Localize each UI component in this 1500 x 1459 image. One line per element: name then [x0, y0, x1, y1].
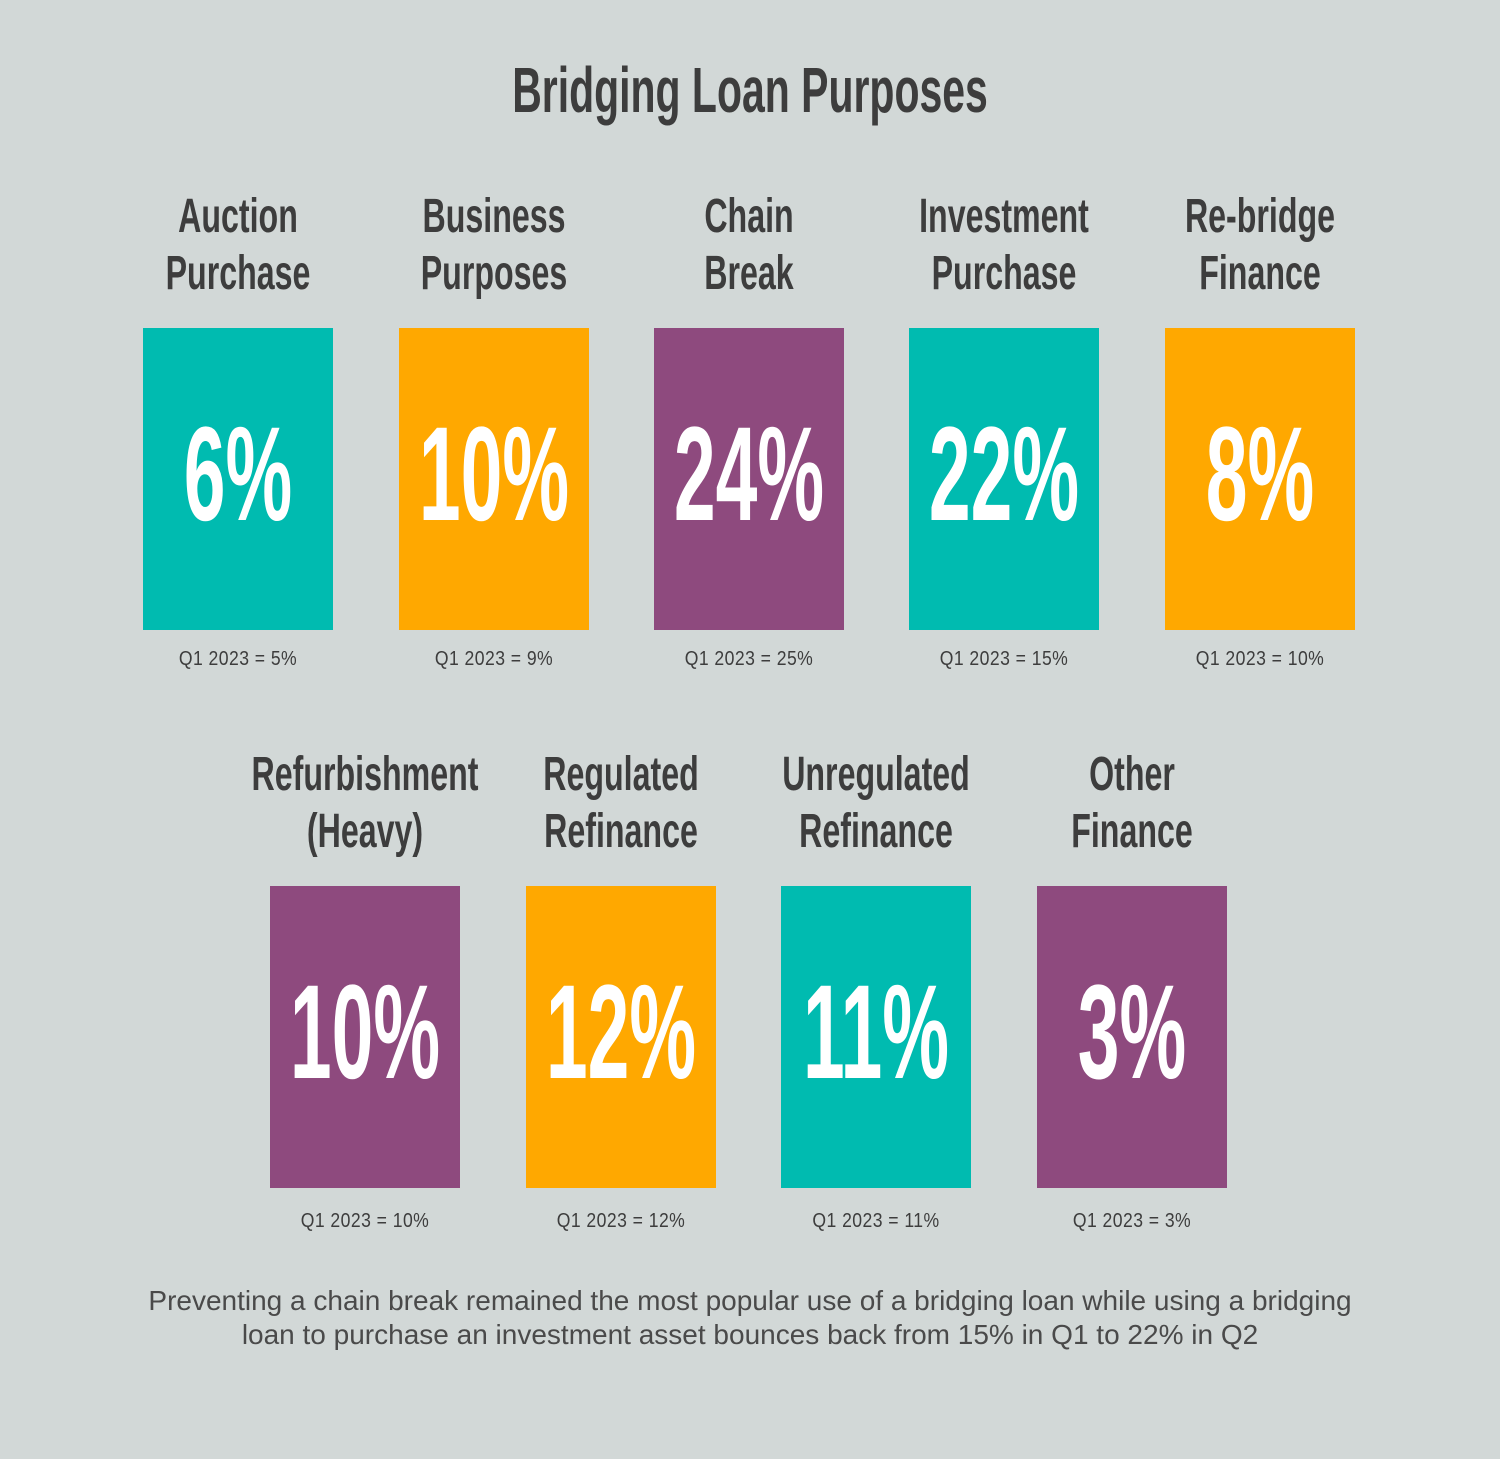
box: auction purchase 6%: 6%	[184, 400, 292, 549]
caption: other: Q1 2023 = 3%	[1073, 1210, 1191, 1232]
heading: refurbishment	[252, 748, 478, 858]
heading: regulated refinance: Regulated	[543, 748, 699, 801]
caption: chain: Q1 2023 = 25%	[685, 648, 813, 670]
box: regulated refinance 12%: 12%	[546, 958, 696, 1107]
caption: re-bridge: Q1 2023 = 10%	[1196, 648, 1324, 670]
footer text: loan to purchase an investment asset bounces back from 15% in Q1 to 22% in Q2	[242, 1319, 1258, 1350]
box: other finance 3%: 3%	[1078, 958, 1186, 1107]
box: unregulated refinance 11%: 11%	[803, 958, 949, 1107]
heading: other finance	[1071, 748, 1193, 858]
caption: investment: Q1 2023 = 15%	[940, 648, 1068, 670]
footer text	[148, 1285, 1352, 1350]
caption: regulated: Q1 2023 = 12%	[557, 1210, 685, 1232]
heading: business purposes	[421, 190, 567, 300]
heading: re-bridge finance: Finance	[1199, 247, 1321, 300]
box: business purposes 10%: 10%	[419, 400, 569, 549]
box: auction purchase 6%	[143, 328, 333, 630]
box: chain break 24%	[654, 328, 844, 630]
box: refurbishment 10%: 10%	[290, 958, 440, 1107]
heading: re-bridge finance: Re-bridge	[1185, 190, 1335, 243]
heading: other finance: Finance	[1071, 805, 1193, 858]
box: regulated refinance 12%	[526, 886, 716, 1188]
heading: regulated refinance: Refinance	[544, 805, 698, 858]
box: re-bridge finance 8%: 8%	[1206, 400, 1314, 549]
footer text: Preventing a chain break remained the most popular use of a bridging loan while using a bridging	[148, 1285, 1352, 1316]
heading: refurbishment: (Heavy)	[307, 805, 423, 858]
heading: investment purchase: Investment	[919, 190, 1089, 243]
box: investment purchase 22%: 22%	[929, 400, 1079, 549]
heading: refurbishment: Refurbishment	[252, 748, 478, 801]
heading: investment purchase	[919, 190, 1089, 300]
heading: unregulated refinance: Unregulated	[782, 748, 970, 801]
caption: unregulated: Q1 2023 = 11%	[812, 1210, 940, 1232]
heading: chain break: Chain	[704, 190, 794, 243]
heading: re-bridge finance	[1185, 190, 1335, 300]
box: other finance 3%	[1037, 886, 1227, 1188]
heading: business purposes: Purposes	[421, 247, 567, 300]
box: business purposes 10%	[399, 328, 589, 630]
heading: auction purchase: Purchase	[166, 247, 310, 300]
heading: other finance: Other	[1089, 748, 1175, 801]
heading: regulated refinance	[543, 748, 699, 858]
title: Bridging Loan Purposes	[512, 54, 988, 126]
caption: refurbishment: Q1 2023 = 10%	[301, 1210, 429, 1232]
heading: business purposes: Business	[422, 190, 565, 243]
heading: chain break	[704, 190, 794, 300]
box: chain break 24%: 24%	[674, 400, 824, 549]
heading: unregulated refinance: Refinance	[799, 805, 953, 858]
caption: auction: Q1 2023 = 5%	[179, 648, 297, 670]
caption: business: Q1 2023 = 9%	[435, 648, 553, 670]
box: investment purchase 22%	[909, 328, 1099, 630]
heading: investment purchase: Purchase	[932, 247, 1076, 300]
heading: unregulated refinance	[782, 748, 970, 858]
heading: chain break: Break	[704, 247, 794, 300]
box: unregulated refinance 11%	[781, 886, 971, 1188]
heading: auction purchase: Auction	[178, 190, 298, 243]
box: refurbishment 10%	[270, 886, 460, 1188]
heading: auction purchase	[166, 190, 310, 300]
box: re-bridge finance 8%	[1165, 328, 1355, 630]
